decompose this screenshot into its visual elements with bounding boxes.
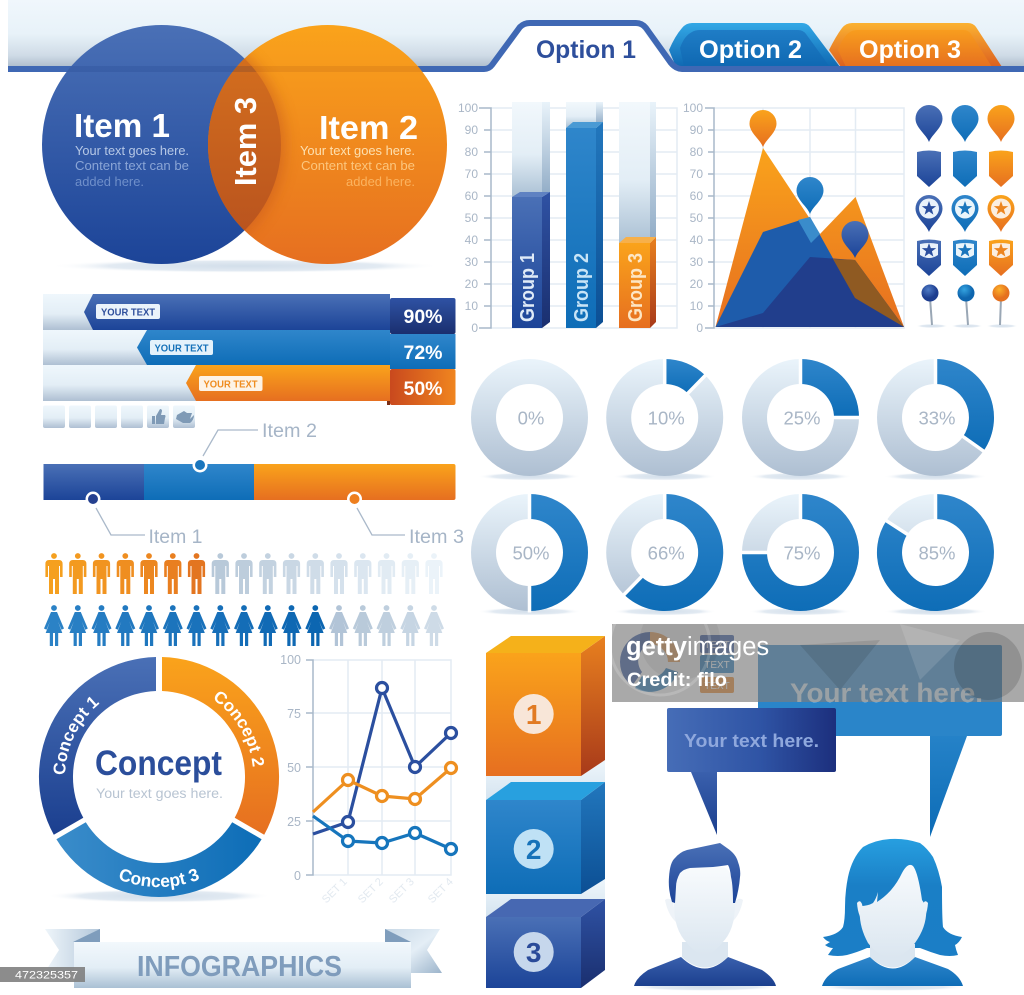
- donut: 10%: 10%: [648, 408, 685, 428]
- donut: 10%: [606, 358, 723, 480]
- speech bubble: right: Your text here.: [790, 678, 983, 708]
- pin: blue: [796, 177, 824, 214]
- line chart: 75: [287, 707, 301, 721]
- stock id tag: [0, 967, 85, 982]
- row: star pins: [916, 195, 1014, 232]
- donut: 75%: [740, 492, 859, 616]
- watermark band: [612, 624, 1024, 702]
- stock id tag: 472325357: [15, 970, 78, 982]
- area: dark navy: [716, 257, 904, 327]
- banner: INFOGRAPHICS: INFOGRAPHICS: [137, 951, 342, 983]
- line chart: SET 2: [356, 876, 386, 906]
- box 3: 3: [526, 937, 541, 968]
- panel: percent ribbons: [43, 294, 456, 405]
- panel: segment bar with callouts: [44, 421, 464, 548]
- row: star shields: [917, 240, 1013, 276]
- ribbon: 90%: 90%: [403, 306, 443, 328]
- line chart: 25: [287, 815, 301, 829]
- speech bubble: right: [758, 645, 1002, 837]
- series: blue: [313, 816, 456, 854]
- marker: Item 2: [192, 458, 208, 472]
- panel: area chart with pins: 40: [690, 233, 703, 247]
- series: orange: [313, 762, 456, 812]
- pin: orange: [750, 110, 776, 147]
- panel: area chart with pins: 70: [690, 167, 703, 181]
- panel: grouped 3D bar chart: 90: [465, 123, 478, 137]
- panel: grouped 3D bar chart: 60: [465, 189, 478, 203]
- segment: Concept 1: Concept 1: [54, 696, 100, 774]
- panel: area chart with pins: 80: [690, 145, 703, 159]
- area: orange: [716, 148, 904, 327]
- panel: grouped 3D bar chart: 0: [471, 321, 478, 335]
- bar: Group 1: [512, 102, 550, 328]
- ribbon: 50%: YOUR TEXT: [204, 378, 258, 390]
- panel: area chart with pins: [683, 101, 904, 335]
- donut: 66%: 66%: [648, 542, 685, 564]
- segment: Concept 2: [162, 657, 280, 835]
- small legend under watermark: TEXT: [704, 640, 730, 651]
- row: shields: [917, 150, 1013, 187]
- bar: Group 1: Group 1: [517, 253, 539, 322]
- label: Item 1: Your text goes here.: [75, 143, 189, 158]
- pictogram row: women: [44, 605, 444, 646]
- ribbon: 72%: [43, 330, 456, 369]
- pictogram row: men: [45, 553, 443, 594]
- area: blue: [716, 217, 904, 327]
- tab: Option 1: [8, 23, 1024, 72]
- donut: 85%: [877, 492, 994, 616]
- panel: grouped 3D bar chart: 20: [465, 277, 478, 291]
- label: Item 3: Item 3: [409, 527, 464, 548]
- watermark brand: gettyimages: [626, 633, 769, 661]
- label: Item 2: Content text can be: [301, 158, 415, 173]
- title: Concept: Concept: [95, 744, 222, 783]
- box 2: 2: [526, 834, 541, 865]
- donut: 66%: [606, 492, 723, 616]
- panel: grouped 3D bar chart: 10: [465, 299, 478, 313]
- pin: navy: [842, 221, 868, 258]
- label: Item 2: Item 2: [262, 421, 317, 442]
- label: Item 2: added here.: [346, 174, 415, 189]
- marker: Item 3: [347, 492, 362, 506]
- ribbon: 72%: 72%: [403, 342, 443, 364]
- ribbon: 90%: YOUR TEXT: [101, 306, 156, 318]
- bar: Group 3: [619, 102, 656, 328]
- label: Item 3: Item 3: [228, 97, 263, 186]
- marker: Item 1: [86, 492, 100, 506]
- line chart: SET 4: [426, 876, 456, 906]
- segment: Concept 1: [38, 657, 156, 835]
- box 2: [486, 782, 605, 894]
- tab: Option 3: [829, 23, 1002, 67]
- panel: area chart with pins: 90: [690, 123, 703, 137]
- panel: area chart with pins: 0: [696, 321, 703, 335]
- panel: area chart with pins: 100: [683, 101, 703, 115]
- bar: Group 2: Group 2: [571, 253, 593, 322]
- panel: grouped 3D bar chart: 30: [465, 255, 478, 269]
- segment: Concept 3: Concept 3: [120, 868, 199, 890]
- panel: grouped 3D bar chart: 40: [465, 233, 478, 247]
- ribbon: 50%: 50%: [403, 378, 443, 400]
- label: Item 1: [74, 107, 189, 189]
- row: plain pins: [916, 105, 1014, 142]
- small legend under watermark: [620, 632, 734, 693]
- avatar: man: [630, 843, 780, 991]
- donut: 50%: 50%: [512, 542, 550, 564]
- ribbon: 72%: YOUR TEXT: [154, 342, 209, 354]
- panel: area chart with pins: 10: [690, 299, 703, 313]
- small legend under watermark: TEXT: [704, 681, 730, 692]
- tab: Option 1: Option 1: [536, 36, 636, 64]
- panel: grouped 3D bar chart: 50: [465, 211, 478, 225]
- icon row: tiles with thumbs: [43, 406, 195, 428]
- ribbon: 50%: [43, 365, 456, 405]
- box 1: 1: [526, 699, 541, 730]
- panel: header band with tabs: [8, 0, 1024, 72]
- donut: 75%: 75%: [783, 542, 821, 564]
- donut: 33%: 33%: [918, 408, 956, 428]
- donut: 0%: [471, 359, 588, 480]
- label: Item 2: [300, 109, 418, 189]
- bar: Group 3: Group 3: [625, 253, 647, 322]
- panel: area chart with pins: 30: [690, 255, 703, 269]
- line chart: 0: [294, 869, 301, 883]
- label: Item 1: Content text can be: [75, 158, 189, 173]
- small legend under watermark: TEXT: [704, 660, 730, 671]
- box 3: [486, 899, 605, 988]
- speech bubble: left: [667, 708, 836, 835]
- line chart: SET 3: [387, 876, 417, 906]
- segment: Concept 2: Concept 2: [214, 692, 264, 767]
- panel: area chart with pins: 20: [690, 277, 703, 291]
- donut: 33%: [877, 358, 994, 480]
- donut: 25%: 25%: [783, 408, 821, 428]
- panel: concept ring: [38, 657, 280, 902]
- banner: INFOGRAPHICS: [45, 929, 442, 988]
- panel: grouped 3D bar chart: 100: [458, 101, 478, 115]
- label: Item 1: Item 1: [74, 107, 170, 144]
- panel: grouped 3D bar chart: 70: [465, 167, 478, 181]
- line chart: 100: [280, 653, 301, 667]
- avatar: woman: [817, 839, 967, 991]
- panel: stacked 3D boxes: [486, 636, 605, 988]
- tab: Option 2: Option 2: [699, 36, 802, 64]
- tab: Option 2: [669, 23, 840, 67]
- panel: grouped 3D bar chart: 80: [465, 145, 478, 159]
- label: Item 1: Item 1: [148, 527, 202, 548]
- donut: 50%: [471, 492, 588, 616]
- panel: map pins and badges: [916, 105, 1018, 328]
- line chart: [280, 653, 456, 906]
- label: Item 1: added here.: [75, 174, 144, 189]
- icon: thumbs down: [176, 411, 194, 423]
- panel: grouped 3D bar chart: [458, 101, 677, 335]
- line chart: SET 1: [320, 876, 350, 906]
- donut: 85%: 85%: [918, 542, 956, 564]
- ribbon: 90%: [43, 294, 456, 334]
- series: navy: [313, 682, 456, 834]
- watermark credit: Credit: filo: [627, 669, 727, 691]
- tab: Option 3: Option 3: [859, 36, 961, 64]
- icon: thumbs up: [152, 409, 166, 424]
- speech bubble: left: Your text here.: [684, 731, 819, 751]
- donut: 0%: 0%: [518, 408, 544, 428]
- segment: Concept 3: [56, 822, 262, 897]
- subtitle: Your text goes here.: [96, 786, 223, 801]
- label: Item 2: Your text goes here.: [300, 143, 415, 158]
- bar: Group 2: [566, 102, 603, 328]
- label: Item 2: Item 2: [319, 109, 418, 146]
- box 1: [486, 636, 605, 776]
- line chart: 50: [287, 761, 301, 775]
- row: push pins: [916, 284, 1018, 328]
- panel: area chart with pins: 50: [690, 211, 703, 225]
- panel: venn diagram: [40, 25, 450, 273]
- donut: 25%: [742, 358, 860, 480]
- panel: area chart with pins: 60: [690, 189, 703, 203]
